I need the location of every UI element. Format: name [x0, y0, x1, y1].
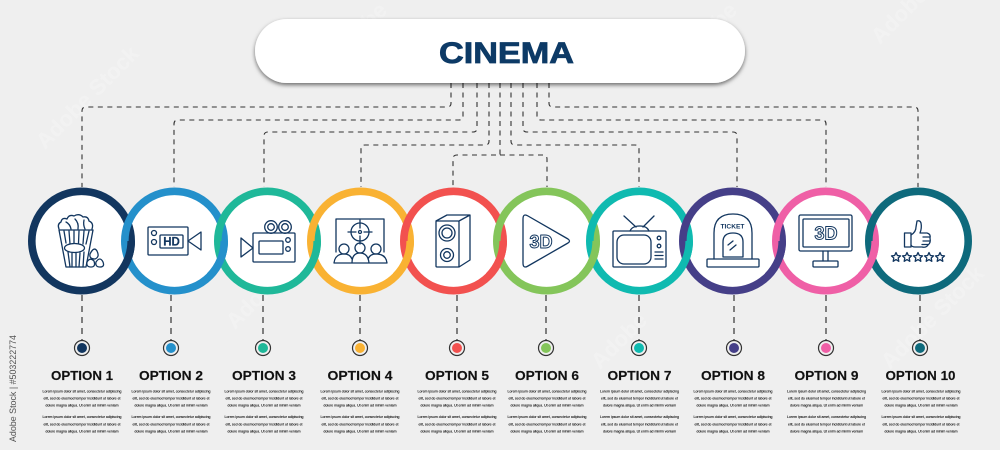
- icon: 3D monitor: 3D: [814, 224, 838, 244]
- option 2: dolore magna aliqua. Ut enim ad minim veniam: [134, 403, 208, 407]
- title: CINEMA: [439, 37, 574, 70]
- option 7: Lorem ipsum dolor sit amet, consectetur adipiscing: [600, 389, 679, 393]
- option 7: Lorem ipsum dolor sit amet, consectetur adipiscing: [600, 415, 679, 419]
- stock watermarks: Adobe Stock: [221, 220, 334, 334]
- option 2: OPTION 2: [139, 368, 203, 383]
- option 4: elit, sed do eiusmod tempor incididunt ut labore et: [322, 422, 399, 426]
- option 8: Lorem ipsum dolor sit amet, consectetur adipiscing: [694, 415, 772, 419]
- option 5: elit, sed do eiusmod tempor incididunt ut labore et: [418, 422, 496, 426]
- option 8: dolore magna aliqua. Ut enim ad minim veniam: [696, 429, 770, 433]
- option 4: dolore magna aliqua. Ut enim ad minim veniam: [324, 403, 396, 407]
- option 6: dolore magna aliqua. Ut enim ad minim veniam: [510, 429, 584, 433]
- icon: ticket booth: [707, 214, 759, 267]
- option 10: elit, sed do eiusmod tempor incididunt ut labore et: [882, 396, 960, 400]
- option 5: dolore magna aliqua. Ut enim ad minim veniam: [420, 429, 494, 433]
- icon: popcorn: [58, 215, 104, 267]
- icon: cinema audience and screen: [334, 219, 387, 263]
- option 9: [787, 340, 866, 433]
- option 1: dolore magna aliqua. Ut enim ad minim veniam: [46, 403, 118, 407]
- option 8: [694, 340, 772, 433]
- icon: retro TV: [613, 216, 666, 267]
- option 7: elit, sed do eiusmod tempor incididunt ut labore et: [601, 422, 679, 426]
- option 7: elit, sed do eiusmod tempor incididunt ut labore et: [601, 396, 679, 400]
- option 3: Lorem ipsum dolor sit amet, consectetur adipiscing: [224, 415, 304, 419]
- interlocked rings: [32, 191, 968, 291]
- option 2: elit, sed do eiusmod tempor incididunt ut labore et: [132, 396, 210, 400]
- option 8: dolore magna aliqua. Ut enim ad minim veniam: [696, 403, 770, 407]
- option 6: elit, sed do eiusmod tempor incididunt ut labore et: [508, 396, 586, 400]
- icon: video camera with reels: [241, 221, 295, 262]
- option 10: [882, 340, 960, 433]
- icon: 3D play triangle: 3D: [529, 232, 553, 252]
- option 4: elit, sed do eiusmod tempor incididunt ut labore et: [322, 396, 399, 400]
- option 6: Lorem ipsum dolor sit amet, consectetur adipiscing: [508, 389, 586, 393]
- option 2: elit, sed do eiusmod tempor incididunt ut labore et: [132, 422, 210, 426]
- option 2: dolore magna aliqua. Ut enim ad minim veniam: [134, 429, 208, 433]
- option 4: OPTION 4: [328, 368, 393, 383]
- option 2: Lorem ipsum dolor sit amet, consectetur adipiscing: [132, 389, 210, 393]
- option 6: OPTION 6: [515, 368, 579, 383]
- option 4: Lorem ipsum dolor sit amet, consectetur adipiscing: [320, 415, 400, 419]
- option 1: OPTION 1: [51, 368, 113, 383]
- option 5: [418, 340, 496, 433]
- option 10: elit, sed do eiusmod tempor incididunt ut labore et: [882, 422, 960, 426]
- option 4: Lorem ipsum dolor sit amet, consectetur adipiscing: [320, 389, 400, 393]
- option 1: dolore magna aliqua. Ut enim ad minim veniam: [46, 429, 118, 433]
- option 7: dolore magna aliqua. Ut enim ad minim veniam: [603, 403, 676, 407]
- option 5: dolore magna aliqua. Ut enim ad minim veniam: [420, 403, 494, 407]
- option 9: Lorem ipsum dolor sit amet, consectetur adipiscing: [787, 415, 866, 419]
- option 8: OPTION 8: [701, 368, 765, 383]
- option 10: dolore magna aliqua. Ut enim ad minim veniam: [884, 429, 958, 433]
- title pill: [255, 19, 745, 83]
- icon: 3D play triangle: [523, 215, 570, 267]
- option 1: [42, 340, 122, 433]
- stock id side text: Adobe Stock | #503222774: [8, 334, 19, 442]
- option 1: elit, sed do eiusmod tempor incididunt ut labore et: [44, 422, 121, 426]
- option 2: [132, 340, 210, 433]
- stock watermarks: Adobe Stock: [31, 40, 144, 154]
- option 4: [320, 340, 400, 433]
- option 6: elit, sed do eiusmod tempor incididunt ut labore et: [508, 422, 586, 426]
- option 5: OPTION 5: [425, 368, 489, 383]
- option 3: elit, sed do eiusmod tempor incididunt ut labore et: [226, 396, 303, 400]
- option 1: elit, sed do eiusmod tempor incididunt ut labore et: [44, 396, 121, 400]
- option 9: elit, sed do eiusmod tempor incididunt ut labore et: [788, 422, 866, 426]
- option 3: Lorem ipsum dolor sit amet, consectetur adipiscing: [224, 389, 304, 393]
- option 1: Lorem ipsum dolor sit amet, consectetur adipiscing: [42, 389, 122, 393]
- stock watermarks: Adobe Stock: [876, 260, 989, 374]
- option 6: dolore magna aliqua. Ut enim ad minim veniam: [510, 403, 584, 407]
- option 9: dolore magna aliqua. Ut enim ad minim veniam: [790, 403, 863, 407]
- option 7: [600, 340, 679, 433]
- bottom connectors: [82, 295, 920, 340]
- icon: HD camera: HD: [163, 236, 180, 248]
- option 7: dolore magna aliqua. Ut enim ad minim veniam: [603, 429, 676, 433]
- option 3: dolore magna aliqua. Ut enim ad minim veniam: [228, 403, 300, 407]
- option 9: OPTION 9: [794, 368, 858, 383]
- stock watermarks: Stock: [436, 383, 496, 444]
- option 8: Lorem ipsum dolor sit amet, consectetur adipiscing: [694, 389, 772, 393]
- option 9: elit, sed do eiusmod tempor incididunt ut labore et: [788, 396, 866, 400]
- option 10: Lorem ipsum dolor sit amet, consectetur adipiscing: [882, 389, 960, 393]
- stock watermarks: Adobe: [586, 307, 652, 374]
- option 6: [508, 340, 586, 433]
- icon: ticket booth: TICKET: [720, 224, 745, 230]
- option 10: dolore magna aliqua. Ut enim ad minim veniam: [884, 403, 958, 407]
- option 8: elit, sed do eiusmod tempor incididunt ut labore et: [694, 422, 772, 426]
- option 5: Lorem ipsum dolor sit amet, consectetur adipiscing: [418, 389, 496, 393]
- option 3: elit, sed do eiusmod tempor incididunt ut labore et: [226, 422, 303, 426]
- option 2: Lorem ipsum dolor sit amet, consectetur adipiscing: [132, 415, 210, 419]
- option 3: [224, 340, 304, 433]
- option 10: Lorem ipsum dolor sit amet, consectetur adipiscing: [882, 415, 960, 419]
- icon: HD camera: [148, 227, 201, 255]
- option 5: elit, sed do eiusmod tempor incididunt ut labore et: [418, 396, 496, 400]
- top connectors: [82, 83, 918, 187]
- option 10: OPTION 10: [886, 368, 956, 383]
- option 7: OPTION 7: [608, 368, 672, 383]
- option 3: dolore magna aliqua. Ut enim ad minim veniam: [228, 429, 300, 433]
- option 6: Lorem ipsum dolor sit amet, consectetur adipiscing: [508, 415, 586, 419]
- option 4: dolore magna aliqua. Ut enim ad minim veniam: [324, 429, 396, 433]
- option 3: OPTION 3: [232, 368, 296, 383]
- option 5: Lorem ipsum dolor sit amet, consectetur adipiscing: [418, 415, 496, 419]
- option 9: dolore magna aliqua. Ut enim ad minim veniam: [790, 429, 863, 433]
- option 9: Lorem ipsum dolor sit amet, consectetur adipiscing: [787, 389, 866, 393]
- icon: thumbs up and stars: [892, 221, 944, 261]
- icon: speaker: [436, 215, 470, 267]
- icon: 3D monitor: [799, 215, 852, 267]
- option 1: Lorem ipsum dolor sit amet, consectetur adipiscing: [42, 415, 122, 419]
- option 8: elit, sed do eiusmod tempor incididunt ut labore et: [694, 396, 772, 400]
